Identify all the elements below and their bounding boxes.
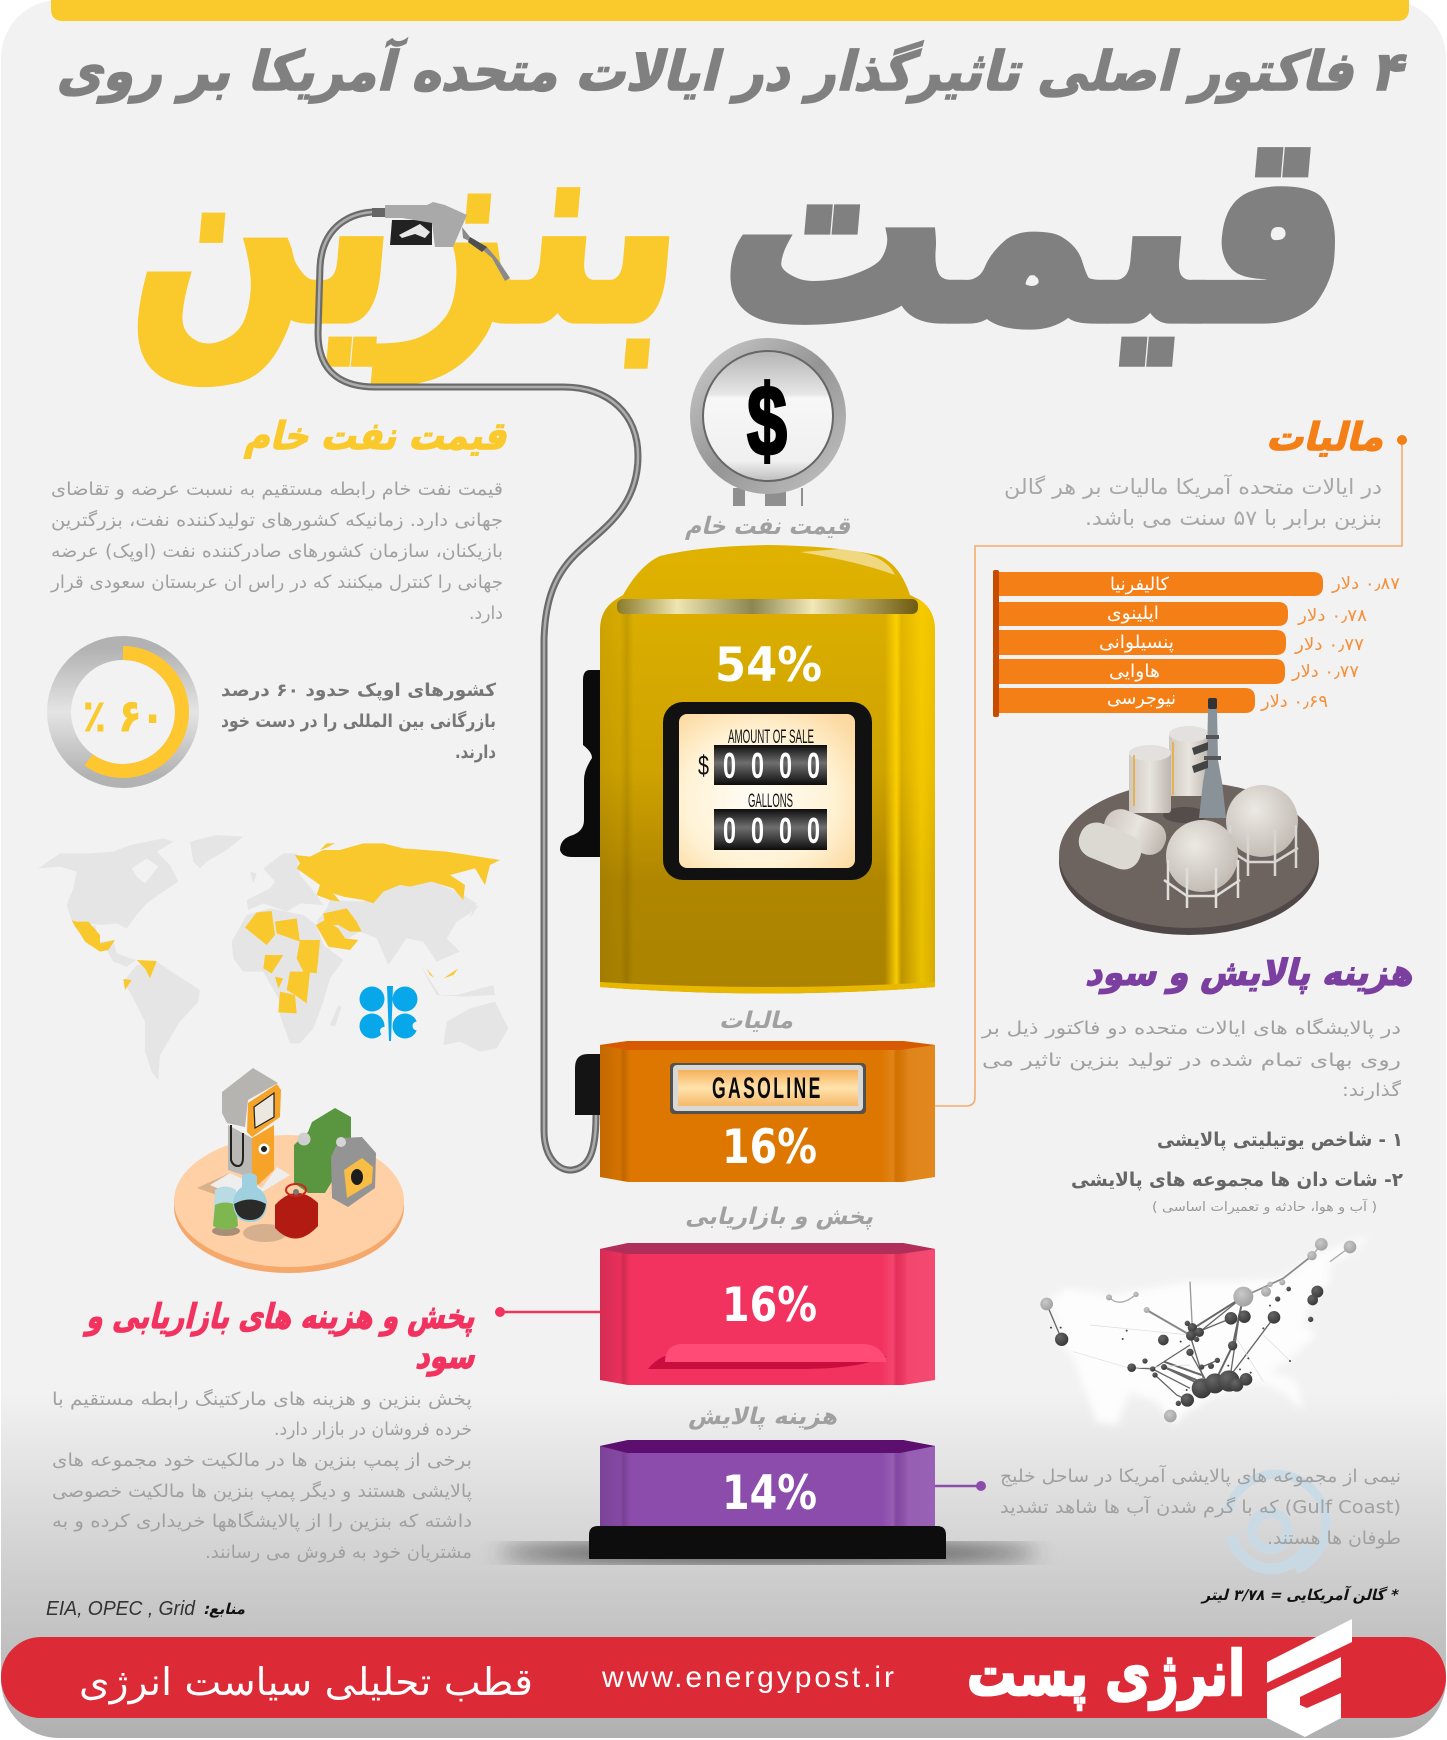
bar: New Jersey: نیوجرسی (1107, 688, 1176, 709)
text: taxes paragraph: در ایالات متحده آمریکا مالیات بر هر گالن (1004, 474, 1382, 499)
heading: distribution and marketing: پخش و هزینه های بازاریابی و (82, 1297, 482, 1337)
gasoline badge: GASOLINE (712, 1072, 823, 1105)
main title: gasoline: بنزین (124, 77, 696, 383)
pump orange segment (600, 1041, 935, 1182)
pump meter: 0 (751, 810, 764, 851)
sources: EIA, OPEC , Grid (46, 1598, 196, 1620)
pump shadow (498, 1543, 1038, 1563)
footer logo (1267, 1619, 1352, 1737)
heading: distribution and marketing (82, 1297, 482, 1377)
connector: pink segment to heading (495, 1307, 600, 1317)
footer band (1, 1619, 1446, 1737)
icon: dollar dial: $ (747, 365, 787, 477)
subtitle heading: ۴ فاکتور اصلی تاثیرگذار در ایالات متحده آمریکا بر روی (53, 38, 1414, 104)
footer tagline: قطب تحلیلی سیاست انرژی (79, 1660, 533, 1705)
bar: California: کالیفرنیا (1110, 574, 1169, 595)
text: distribution paragraph: داشته که بنزین را از پالایشگاهها خریداری کرده و به (52, 1510, 472, 1532)
pump purple segment (600, 1440, 935, 1528)
text: distribution paragraph: پالایشی هستند و دیگر پمپ بنزین ها مالکیت خصوصی (52, 1480, 472, 1502)
pump meter: GALLONS (748, 791, 793, 812)
pump meter: 0 (779, 810, 792, 851)
icon: OPEC logo (360, 986, 422, 1041)
text: crude oil paragraph: دارد. (469, 603, 503, 624)
pump handle (black) (560, 670, 600, 857)
label: crude price: قیمت نفت خام (684, 511, 856, 540)
text: gulf coast note: (Gulf Coast) که با گرم شدن آب ها شاهد تشدید (1000, 1495, 1401, 1518)
bar: Pennsylvania: پنسیلوانی (1099, 632, 1174, 653)
list: refining factors: ۱ - شاخص یوتیلیتی پالایشی (1157, 1129, 1403, 1151)
text: gulf coast note (1000, 1464, 1401, 1549)
text: refining paragraph: روی بهای تمام شده در تولید بنزین تاثیر می (982, 1050, 1401, 1071)
world map (38, 835, 508, 1080)
pump meter: 0 (751, 745, 764, 786)
heading: crude oil price: قیمت نفت خام (242, 415, 515, 459)
bar: New Jersey (999, 688, 1328, 713)
connector: orange segment to tax (935, 440, 1402, 1106)
pump meter: $ (698, 750, 709, 781)
percent 14: 14% (722, 1466, 817, 1521)
text: crude oil paragraph (50, 479, 503, 624)
label: refining cost: هزینه پالایش (687, 1402, 842, 1430)
text: distribution paragraph: مشتریان خود به فروش می رسانند. (205, 1542, 472, 1563)
text: crude oil paragraph: جهانی را کنترل میکنند که در راس ان عربستان سعودی قرار (50, 572, 503, 593)
illustration: gas station items (174, 1068, 404, 1273)
pump small handle (575, 1054, 600, 1115)
text: distribution paragraph: برخی از پمپ بنزین ها در مالکیت خود مجموعه های (52, 1450, 472, 1471)
pump meter: 0 (807, 745, 820, 786)
donut chart: 60 percent: ۶۰ ٪ (83, 691, 164, 742)
pump meter: 0 (723, 745, 736, 786)
pump meter: 0 (807, 810, 820, 851)
bar: Illinois: ایلینوی (1107, 603, 1159, 624)
pump meter: 0 (779, 745, 792, 786)
sources: منابع: (202, 1600, 248, 1618)
text: crude oil paragraph: جهانی دارد. زمانیکه کشورهای تولیدکننده نفت، بزرگترین (51, 509, 503, 531)
list: refining factors: ( آب و هوا، حادثه و تعمیرات اساسی ) (1152, 1198, 1377, 1215)
list: refining factors: ۲- شات دان ها مجموعه های پالایشی (1071, 1169, 1403, 1191)
label: tax: مالیات (718, 1006, 798, 1034)
text: OPEC share: دارند. (455, 742, 496, 763)
footer brand name: انرژی پست (967, 1637, 1245, 1710)
bar: Illinois (999, 602, 1367, 626)
top yellow bar (51, 0, 1409, 21)
percent 16 pink: 16% (722, 1278, 817, 1333)
percent 54: 54% (715, 638, 822, 693)
text: distribution paragraph (52, 1388, 472, 1563)
text: OPEC share: کشورهای اوپک حدود ۶۰ درصد (221, 680, 497, 701)
fuel hose (318, 212, 638, 1170)
icon: hurricane watermark (1228, 1474, 1326, 1570)
heading: refining cost and profit: هزینه پالایش و سود (1083, 952, 1420, 994)
text: gulf coast note: طوفان ها هستند. (1267, 1528, 1401, 1549)
bar: Hawaii: هاوایی (1109, 661, 1160, 682)
text: distribution paragraph: پخش بنزین و هزینه های مارکتینگ رابطه مستقیم با (52, 1388, 472, 1410)
list: refining factors (1071, 1129, 1403, 1215)
footer url: www.energypost.ir (601, 1661, 894, 1694)
bar: Illinois: ۰٫۷۸ دلار (1297, 606, 1367, 626)
map: US refineries (1040, 1235, 1370, 1425)
bar: California (999, 572, 1400, 596)
text: refining paragraph (981, 1017, 1401, 1101)
text: OPEC share: بازرگانی بین المللی را در دست خود (221, 710, 496, 732)
text: crude oil paragraph: قیمت نفت خام رابطه مستقیم به نسبت عرضه و تقاضای (51, 479, 503, 500)
pump meter (663, 702, 872, 880)
label: distribution and marketing: پخش و بازاریابی (684, 1202, 878, 1230)
pump yellow body (600, 545, 935, 994)
percent 16 orange: 16% (722, 1120, 817, 1175)
text: taxes paragraph (1004, 474, 1382, 530)
icon: fuel nozzle (372, 202, 510, 281)
illustration: refinery (1059, 698, 1319, 935)
pump pink segment (600, 1243, 935, 1385)
bar: Pennsylvania (999, 630, 1364, 655)
icon: dollar dial (690, 338, 846, 506)
pink slot handle (648, 1356, 887, 1369)
gasoline badge (670, 1063, 866, 1114)
bar: Pennsylvania: ۰٫۷۷ دلار (1294, 635, 1364, 655)
donut chart: 60 percent (59, 648, 187, 776)
pump meter: 0 (723, 810, 736, 851)
note: gallon conversion: * گالن آمریکایی = ۳/۷۸ لیتر (1200, 1585, 1401, 1604)
heading: distribution and marketing: سود (413, 1337, 482, 1377)
bar chart: state taxes (993, 570, 1400, 717)
heading: taxes: مالیات (1264, 416, 1392, 460)
text: gulf coast note: نیمی از مجموعه های پالایشی آمریکا در ساحل خلیج (1000, 1464, 1401, 1487)
connector: purple segment to note (935, 1481, 986, 1491)
bar: Hawaii: ۰٫۷۷ دلار (1291, 662, 1359, 682)
bar: California: ۰٫۸۷ دلار (1331, 574, 1400, 594)
pump base (589, 1526, 946, 1559)
text: distribution paragraph: خرده فروشان در بازار دارد. (274, 1419, 472, 1440)
text: taxes paragraph: بنزین برابر با ۵۷ سنت می باشد. (1085, 506, 1382, 530)
pump meter: AMOUNT OF SALE (728, 727, 814, 748)
text: refining paragraph: گذارند: (1342, 1079, 1401, 1101)
bar: Hawaii (999, 659, 1359, 684)
text: refining paragraph: در پالایشگاه های ایالات متحده دو فاکتور ذیل بر (981, 1017, 1401, 1039)
text: crude oil paragraph: بازیکنان، سازمان کشورهای صادرکننده نفت (اوپک) عرضه (51, 541, 503, 562)
text: OPEC share (221, 680, 497, 763)
bar: New Jersey: ۰٫۶۹ دلار (1260, 692, 1328, 712)
